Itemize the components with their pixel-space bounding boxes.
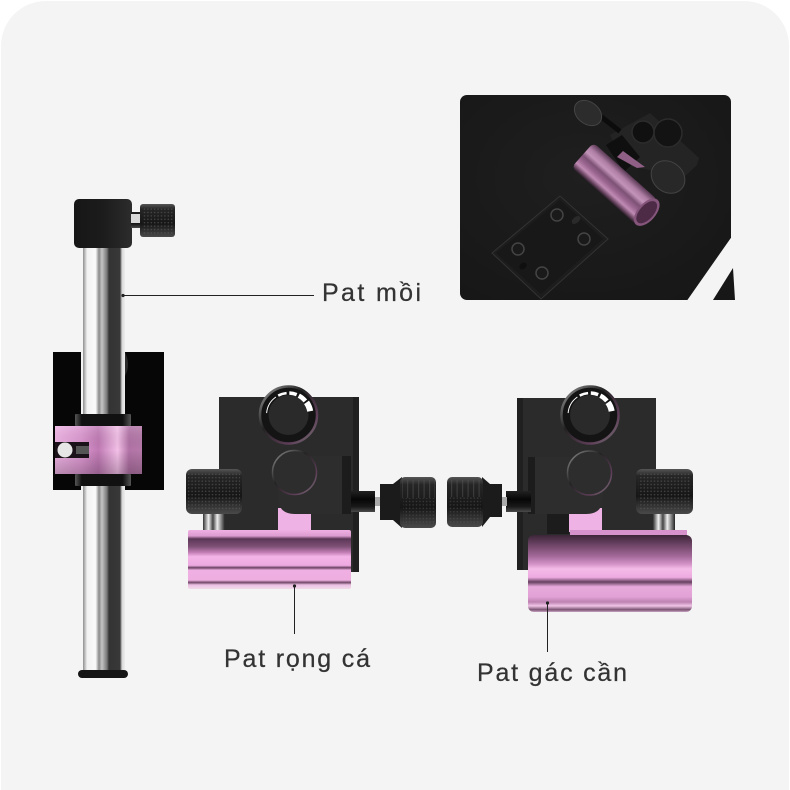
bracket block: [528, 457, 603, 514]
black spacer: [547, 510, 569, 534]
label line: Pat mồi: [121, 294, 314, 297]
top knob: [131, 204, 175, 237]
top cap: [74, 199, 132, 248]
pink clamp: [55, 426, 142, 474]
corner cut-out: [688, 238, 731, 300]
label: Pat gác cần: Pat gác cần: [477, 659, 627, 687]
label: Pat mồi: Pat mồi: [322, 279, 421, 307]
pink cylinder: [188, 530, 351, 589]
collars: [75, 414, 131, 426]
bracket body: [574, 100, 698, 176]
lower screw: [272, 450, 316, 494]
pink cylinder: [528, 535, 692, 612]
plate: [219, 397, 359, 572]
dial: [562, 386, 618, 444]
left assembly: bait bracket rod: [53, 199, 175, 678]
right assembly: rod rest bracket: [447, 386, 693, 612]
label line: Pat gác cần: [546, 601, 549, 652]
label line: Pat rọng cá: [293, 584, 296, 634]
plate: [517, 398, 656, 570]
dial: [260, 386, 317, 444]
pink tab: [278, 508, 311, 531]
pink cylinder: [574, 144, 660, 226]
mounting plate: [492, 196, 608, 299]
left knob and post: [186, 469, 242, 531]
rod foot: [78, 670, 128, 678]
side shaft and knob: [447, 477, 531, 527]
pink tab: [569, 508, 602, 532]
lower screw: [568, 451, 612, 495]
steel rod: [83, 247, 125, 673]
side shaft and knob: [351, 477, 436, 528]
centre assembly: fish ring bracket: [186, 386, 436, 589]
lower right knob: [650, 160, 686, 194]
pink lip: [570, 530, 687, 537]
label: Pat rọng cá: Pat rọng cá: [224, 645, 370, 673]
inset photo: bracket parts on dark background: [460, 95, 735, 302]
right knob and post: [636, 469, 693, 531]
bracket block: [278, 456, 351, 514]
corner triangle: [713, 268, 735, 300]
back plate: [53, 352, 164, 490]
